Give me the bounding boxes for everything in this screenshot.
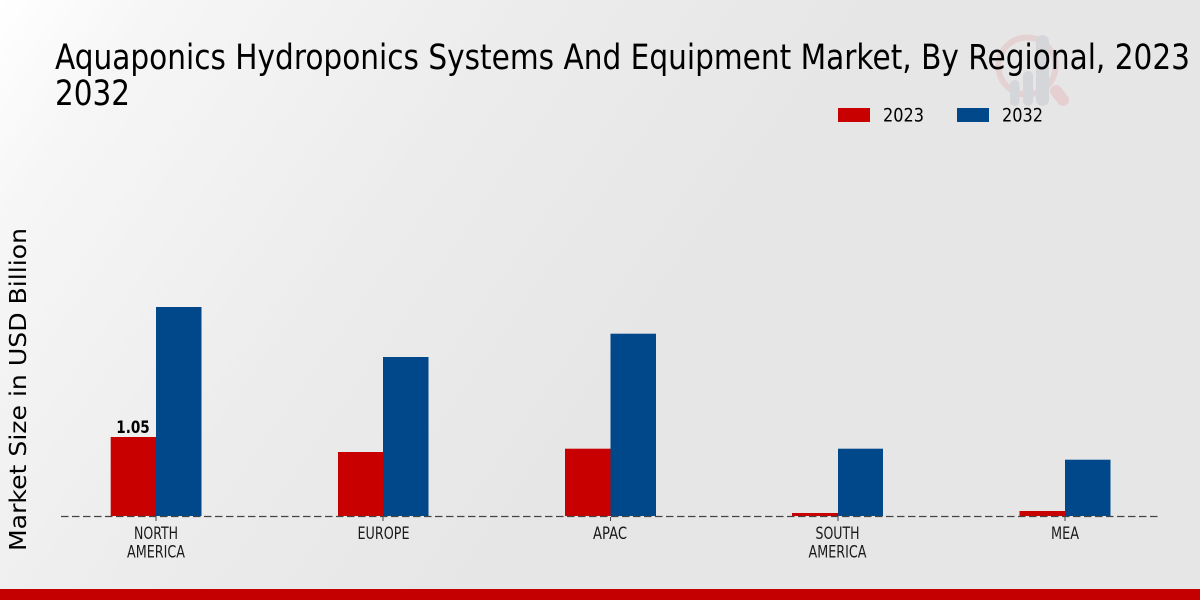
category labels: EUROPE — [358, 524, 410, 544]
category labels: APAC — [593, 524, 627, 544]
bars: North America — [111, 307, 202, 516]
footer bar — [0, 589, 1200, 600]
bars: APAC — [565, 334, 656, 516]
legend: 2023 — [883, 104, 924, 126]
category labels: AMERICA — [127, 542, 185, 562]
title: 2032 — [55, 74, 130, 114]
axis baseline — [61, 516, 1160, 518]
category labels: AMERICA — [808, 542, 867, 562]
category labels: SOUTH — [816, 524, 860, 544]
category labels: NORTH — [134, 524, 178, 544]
axis ticks — [156, 517, 1065, 521]
bars: South America — [792, 449, 883, 516]
title — [55, 38, 1190, 114]
data label: 1.05 — [116, 418, 150, 438]
category labels: MEA — [1051, 524, 1079, 544]
category labels — [127, 524, 1079, 562]
bars: MEA — [1020, 460, 1110, 516]
bars: Europe — [338, 357, 428, 516]
y axis label: Market Size in USD Billion — [4, 228, 32, 551]
bar chart — [61, 307, 1160, 562]
legend: 2032 — [1002, 104, 1043, 126]
legend — [838, 104, 1043, 126]
icon: watermark magnifier with bars — [998, 35, 1063, 106]
